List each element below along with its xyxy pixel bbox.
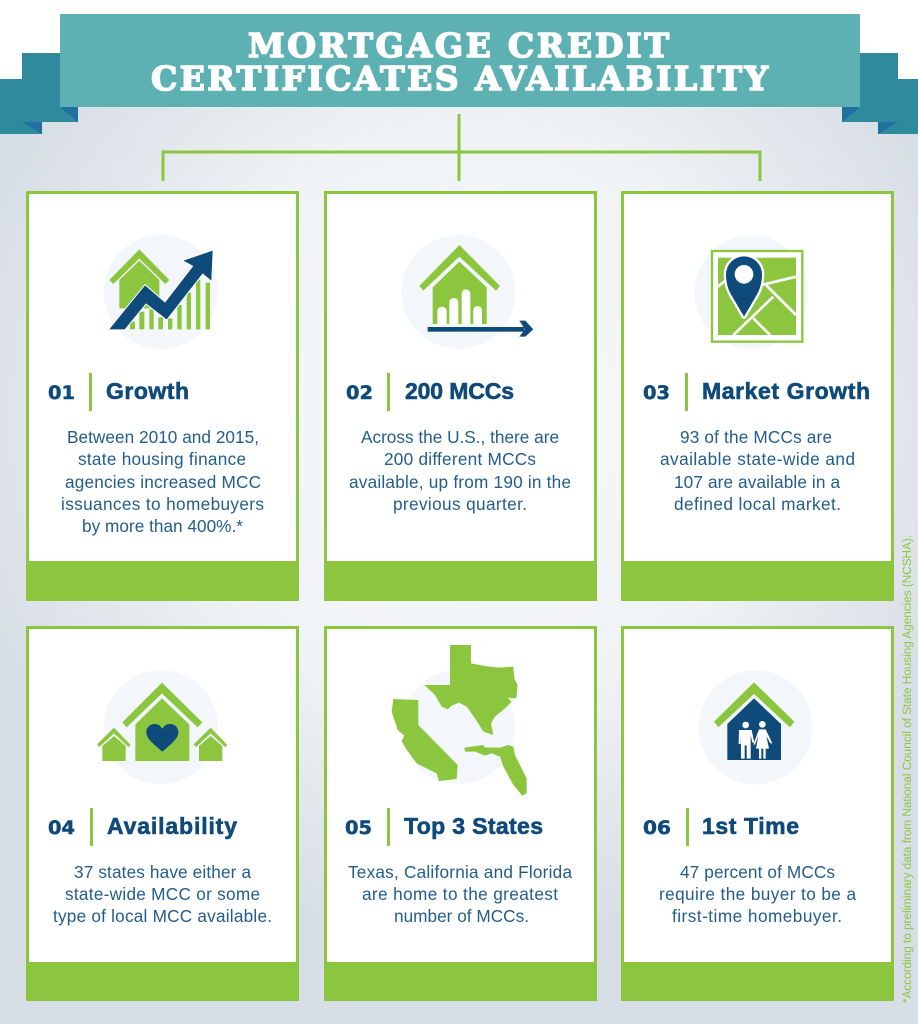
text: top 3 states description bbox=[348, 862, 572, 926]
heading: Top 3 States: Top 3 States bbox=[404, 813, 543, 839]
panel: 05 top 3 states bbox=[324, 628, 597, 1001]
number 02: 02 bbox=[346, 382, 373, 404]
panel: 03 market growth bbox=[621, 192, 894, 601]
text: growth description: state housing finance bbox=[78, 449, 246, 469]
text: availability description: type of local MCC available. bbox=[53, 906, 272, 926]
heading: 1st Time: 1st Time bbox=[702, 813, 799, 839]
text: 1st time description: require the buyer to be a bbox=[659, 884, 856, 904]
text: 200 MCCs description: previous quarter. bbox=[393, 494, 527, 514]
number 05: 05 bbox=[345, 817, 372, 839]
text: growth description: agencies increased MCC bbox=[65, 472, 261, 492]
text: top 3 states description: Texas, California and Florida bbox=[348, 862, 572, 882]
text: top 3 states description: number of MCCs. bbox=[394, 906, 529, 926]
panel: 06 1st time bbox=[621, 628, 894, 1001]
number 04: 04 bbox=[48, 817, 75, 839]
text: 200 MCCs description: Across the U.S., there are bbox=[361, 427, 559, 447]
panel: 04 availability bbox=[26, 628, 299, 1001]
heading: 200 MCCs: 200 MCCs bbox=[405, 378, 514, 404]
icon: three houses with heart bbox=[97, 670, 227, 784]
text: market growth description bbox=[660, 427, 855, 514]
icon: house with rising arrow bbox=[104, 235, 218, 349]
panel: 02 200 MCCs bbox=[324, 192, 597, 601]
heading: Growth: Growth bbox=[106, 378, 189, 404]
text: availability description: state-wide MCC or some bbox=[65, 884, 260, 904]
text: growth description bbox=[61, 427, 264, 536]
icon: house with bars and arrow bbox=[401, 235, 533, 349]
icon: house with couple bbox=[699, 670, 813, 784]
icon: Texas, California and Florida bbox=[392, 645, 527, 796]
footnote: *According to preliminary data from National Council of State Housing Agencies (NCSHA). bbox=[902, 535, 914, 1003]
connector lines bbox=[163, 114, 760, 181]
text: availability description bbox=[53, 862, 272, 926]
title: MORTGAGE CREDIT bbox=[248, 26, 669, 65]
heading: Market Growth: Market Growth bbox=[702, 378, 870, 404]
text: 1st time description bbox=[659, 862, 856, 926]
right ribbon bbox=[842, 53, 918, 134]
text: growth description: Between 2010 and 2015, bbox=[67, 427, 259, 447]
title banner bbox=[60, 14, 860, 107]
number 06: 06 bbox=[643, 817, 671, 839]
text: 1st time description: 47 percent of MCCs bbox=[680, 862, 835, 882]
text: top 3 states description: are home to the greatest bbox=[362, 884, 558, 904]
text: 200 MCCs description: available, up from 190 in the bbox=[349, 472, 571, 492]
text: availability description: 37 states have either a bbox=[74, 862, 251, 882]
text: growth description: issuances to homebuyers bbox=[61, 494, 264, 514]
left ribbon bbox=[0, 53, 78, 134]
text: market growth description: 93 of the MCCs are bbox=[680, 427, 832, 447]
title: CERTIFICATES AVAILABILITY bbox=[151, 59, 768, 98]
text: market growth description: defined local market. bbox=[674, 494, 841, 514]
heading: Availability: Availability bbox=[107, 813, 237, 839]
text: 1st time description: first-time homebuyer. bbox=[672, 906, 842, 926]
number 01: 01 bbox=[48, 382, 75, 404]
text: market growth description: available state-wide and bbox=[660, 449, 855, 469]
text: 200 MCCs description: 200 different MCCs bbox=[384, 449, 536, 469]
title bbox=[151, 26, 768, 98]
number 03: 03 bbox=[643, 382, 670, 404]
panel: 01 growth bbox=[26, 192, 299, 601]
icon: map with pin bbox=[694, 235, 808, 349]
text: growth description: by more than 400%.* bbox=[82, 516, 243, 536]
text: market growth description: 107 are available in a bbox=[674, 472, 840, 492]
text: 200 MCCs description bbox=[349, 427, 571, 514]
